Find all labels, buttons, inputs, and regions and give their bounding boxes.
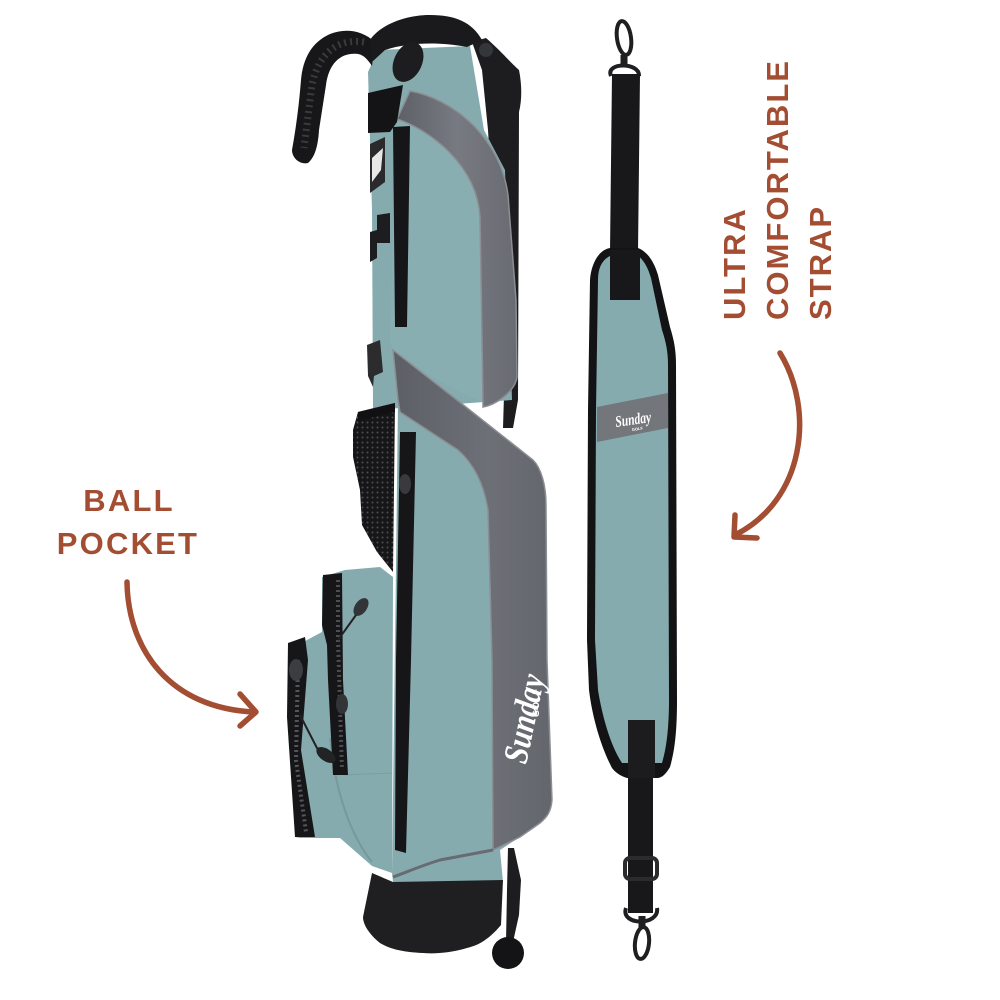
bag top rim	[370, 15, 482, 62]
brand tag	[370, 137, 385, 193]
black patch	[368, 85, 403, 133]
grey label	[597, 393, 668, 442]
lower zipper	[395, 432, 416, 853]
strap logo: Sunday	[614, 409, 653, 431]
top webbing	[610, 74, 640, 252]
foot ball	[492, 937, 524, 969]
bottom clip	[625, 908, 657, 960]
label: ball pocket: POCKET	[57, 526, 199, 561]
bottom piping	[393, 850, 493, 877]
label: ball pocket: BALL	[83, 483, 175, 518]
arrow: strap	[734, 353, 800, 538]
side buckle	[367, 340, 383, 387]
label: ultra comfortable strap: ULTRA	[717, 207, 752, 320]
mesh side pocket	[353, 403, 395, 572]
label: ultra comfortable strap: COMFORTABLE	[760, 59, 795, 320]
strap pad	[587, 248, 677, 778]
upper pocket panel	[390, 120, 483, 402]
label: ball pocket	[57, 483, 199, 561]
shoulder strap	[587, 20, 677, 960]
label: ultra comfortable strap	[717, 59, 838, 320]
upper grey trim	[397, 91, 517, 407]
strap logo: GOLF	[631, 425, 644, 432]
lower body	[392, 350, 552, 882]
logo on bag: Sunday	[496, 670, 553, 767]
lower grey trim	[393, 350, 552, 850]
webbing tabs	[610, 250, 640, 300]
stand legs	[472, 38, 521, 942]
upper body	[368, 46, 512, 410]
top buckle	[386, 37, 430, 87]
slider buckle	[625, 858, 657, 879]
stand hinge	[479, 43, 493, 57]
logo on bag: GOLF	[531, 688, 541, 717]
bottom base	[363, 873, 503, 953]
bottom webbing	[628, 778, 653, 913]
side strap	[370, 213, 390, 262]
ball pocket	[287, 567, 393, 873]
upper zipper	[393, 126, 410, 327]
label: ultra comfortable strap: STRAP	[803, 205, 838, 320]
carry handle	[292, 31, 375, 163]
zipper pull	[399, 474, 411, 494]
arrow: ball pocket	[127, 582, 256, 726]
strap logo	[614, 409, 653, 432]
tag logo	[372, 148, 383, 182]
golf bag	[287, 15, 553, 969]
top clip	[610, 20, 639, 76]
